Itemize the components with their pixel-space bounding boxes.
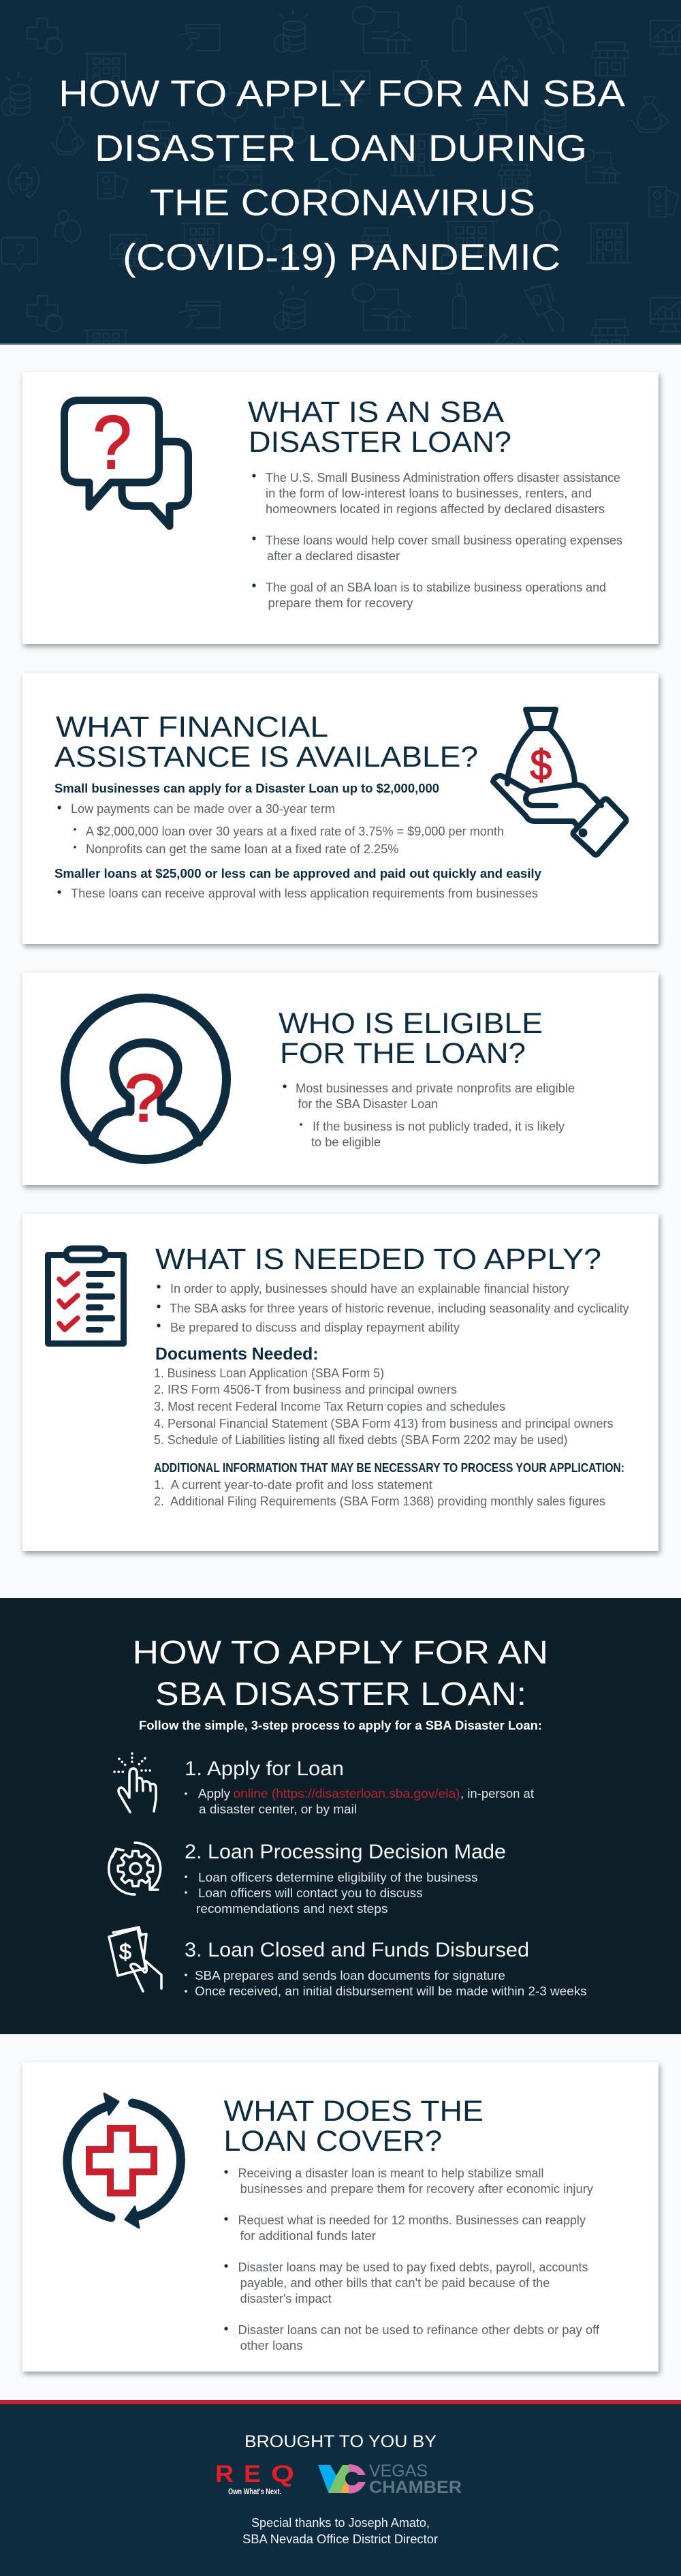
text block: eligibility bullets xyxy=(283,1082,575,1149)
step 3: loan closed and funds disbursed xyxy=(109,1927,587,1998)
icon: gear with arrows xyxy=(109,1843,161,1895)
text block: additional information list xyxy=(154,1478,605,1508)
heading: documents needed: Documents Needed: xyxy=(155,1345,319,1364)
icon: hand holding money xyxy=(109,1927,161,1991)
text block: additional information list: 1. A current year-to-date profit and loss statement xyxy=(154,1478,432,1492)
icon: person with question mark xyxy=(65,998,226,1160)
text block: additional information list: 2. Additional Filing Requirements (SBA Form 1368) providing monthly sales figures xyxy=(154,1494,605,1508)
text block: documents list: 2. IRS Form 4506-T from business and principal owners xyxy=(154,1383,457,1396)
heading: how to apply for an SBA disaster loan xyxy=(132,1635,548,1713)
panel: footer xyxy=(0,2400,681,2576)
title: DISASTER LOAN DURING xyxy=(95,127,587,169)
text block: smaller loans xyxy=(54,867,541,900)
step 2 text: Loan officers will contact you to discuss xyxy=(198,1886,422,1900)
text block: SBA disaster loan bullets: in the form of low-interest loans to businesses, renters, and xyxy=(266,487,592,500)
heading: what financial assistance is available: WHAT FINANCIAL xyxy=(56,711,328,743)
heading: what does the loan cover: WHAT DOES THE xyxy=(223,2095,484,2128)
heading: additional information: ADDITIONAL INFORMATION THAT MAY BE NECESSARY TO PROCESS YOUR APPLICATION: xyxy=(154,1461,624,1475)
logo: REQ xyxy=(215,2461,294,2496)
title: THE CORONAVIRUS xyxy=(150,181,535,224)
panel: who is eligible xyxy=(22,972,659,1185)
text block: loan coverage bullets: Request what is needed for 12 months. Businesses can reapply xyxy=(238,2213,586,2227)
icon: person with question mark: ? xyxy=(125,1060,165,1135)
panel: what does the loan cover xyxy=(22,2062,659,2372)
heading: how to apply for an SBA disaster loan: SBA DISASTER LOAN: xyxy=(155,1676,526,1713)
step 1 title: 1. Apply for Loan xyxy=(185,1758,344,1780)
text block: application bullets: The SBA asks for three years of historic revenue, including seasonality and cyclicality xyxy=(170,1302,629,1315)
heading: what is an SBA disaster loan xyxy=(248,396,511,459)
step 2 text: Loan officers determine eligibility of the business xyxy=(198,1871,478,1884)
text block: application bullets: Be prepared to discuss and display repayment ability xyxy=(170,1321,460,1334)
panel: hero header xyxy=(0,0,681,369)
footer heading: BROUGHT TO YOU BY xyxy=(244,2432,437,2451)
text block: SBA disaster loan bullets: after a declared disaster xyxy=(267,549,400,563)
text block: loan up to two million: A $2,000,000 loan over 30 years at a fixed rate of 3.75% = $9,000 per month xyxy=(86,825,504,838)
text block: SBA disaster loan bullets: prepare them for recovery xyxy=(268,596,413,610)
text block: SBA disaster loan bullets: homeowners located in regions affected by declared disasters xyxy=(266,502,605,516)
logo: Vegas Chamber: VEGAS xyxy=(369,2462,428,2481)
title: HOW TO APPLY FOR AN SBA xyxy=(59,72,625,114)
text block: application bullets xyxy=(157,1282,629,1334)
text block: documents list: 4. Personal Financial Statement (SBA Form 413) from business and principal owners xyxy=(154,1417,613,1430)
step 2 title: 2. Loan Processing Decision Made xyxy=(185,1841,506,1863)
text block: loan up to two million: Low payments can be made over a 30-year term xyxy=(71,802,335,816)
text block: loan coverage bullets: Disaster loans can not be used to refinance other debts or pay off xyxy=(238,2323,600,2337)
text block: loan coverage bullets: other loans xyxy=(240,2339,303,2352)
text block: eligibility bullets: If the business is not publicly traded, it is likely xyxy=(313,1120,565,1133)
text block: loan coverage bullets: for additional funds later xyxy=(240,2229,376,2243)
panel: what is needed to apply xyxy=(22,1214,659,1551)
text block: loan coverage bullets: Receiving a disaster loan is meant to help stabilize small xyxy=(238,2166,543,2180)
heading: what financial assistance is available: ASSISTANCE IS AVAILABLE? xyxy=(54,741,478,773)
logo: Vegas Chamber xyxy=(318,2462,462,2497)
step 2 text: recommendations and next steps xyxy=(196,1902,388,1916)
title xyxy=(59,72,625,278)
text block: smaller loans: Smaller loans at $25,000 or less can be approved and paid out quickly and easily xyxy=(54,867,541,880)
text block: documents list: 5. Schedule of Liabilities listing all fixed debts (SBA Form 2202 may be used) xyxy=(154,1433,568,1447)
heading: what is an SBA disaster loan: DISASTER LOAN? xyxy=(249,426,511,459)
logo: REQ: E xyxy=(244,2461,261,2487)
text block: eligibility bullets: to be eligible xyxy=(311,1135,381,1149)
text block: SBA disaster loan bullets xyxy=(252,471,622,610)
icon: speech bubbles with question mark xyxy=(64,401,188,526)
step 1 text: , in-person at xyxy=(460,1787,534,1800)
heading: what does the loan cover: LOAN COVER? xyxy=(223,2125,442,2158)
step 3 text xyxy=(185,1969,587,1998)
heading: who is eligible: WHO IS ELIGIBLE xyxy=(279,1007,543,1040)
logo: REQ: Own What's Next. xyxy=(228,2487,281,2496)
text block: documents list xyxy=(154,1366,613,1447)
step 2: loan processing decision made xyxy=(109,1841,506,1916)
special thanks text: Special thanks to Joseph Amato, xyxy=(251,2516,430,2530)
text block: loan up to two million xyxy=(54,782,504,856)
heading: what financial assistance is available xyxy=(54,711,478,773)
step 1 text: online (https://disasterloan.sba.gov/ela) xyxy=(233,1787,460,1800)
text block: loan up to two million: Nonprofits can get the same loan at a fixed rate of 2.25% xyxy=(86,842,399,856)
heading: what does the loan cover xyxy=(223,2095,484,2158)
icon: money bag in hand: $ xyxy=(530,742,552,789)
text block: documents list: 1. Business Loan Application (SBA Form 5) xyxy=(154,1366,384,1380)
logo: REQ: Q xyxy=(271,2461,294,2487)
step 3 text: SBA prepares and sends loan documents for signature xyxy=(195,1969,505,1982)
title: (COVID-19) PANDEMIC xyxy=(123,236,560,278)
step 3 title: 3. Loan Closed and Funds Disbursed xyxy=(185,1939,529,1961)
subheading: three step process: Follow the simple, 3-step process to apply for a SBA Disaster Loan: xyxy=(139,1719,542,1732)
panel: how to apply steps xyxy=(0,1598,681,2034)
heading: who is eligible: FOR THE LOAN? xyxy=(280,1037,526,1070)
step 2 text xyxy=(185,1871,478,1916)
icon: money bag in hand xyxy=(493,709,627,855)
text block: SBA disaster loan bullets: These loans would help cover small business operating expenses xyxy=(266,534,622,547)
panel: what is an SBA disaster loan xyxy=(22,372,659,644)
heading: how to apply for an SBA disaster loan: HOW TO APPLY FOR AN xyxy=(132,1635,548,1671)
text block: documents list: 3. Most recent Federal Income Tax Return copies and schedules xyxy=(154,1400,505,1413)
text block: smaller loans: These loans can receive approval with less application requirements from businesses xyxy=(71,887,538,900)
heading: who is eligible xyxy=(279,1007,543,1070)
step 3 text: Once received, an initial disbursement will be made within 2-3 weeks xyxy=(195,1984,587,1998)
heading: what is an SBA disaster loan: WHAT IS AN SBA xyxy=(248,396,504,429)
icon: hand holding money: $ xyxy=(119,1939,131,1964)
special thanks text: SBA Nevada Office District Director xyxy=(242,2532,438,2546)
panel: what financial assistance is available xyxy=(22,673,659,944)
icon: clipboard checklist xyxy=(48,1248,124,1344)
text block: SBA disaster loan bullets: The goal of an SBA loan is to stabilize business operations and xyxy=(266,581,606,594)
step 1 text xyxy=(185,1787,534,1816)
text block: eligibility bullets: for the SBA Disaster Loan xyxy=(298,1097,438,1111)
special thanks text xyxy=(242,2516,438,2546)
text block: loan coverage bullets: payable, and other bills that can't be paid because of the xyxy=(240,2276,550,2290)
text block: loan coverage bullets: businesses and prepare them for recovery after economic injury xyxy=(240,2182,593,2196)
icon: hand tapping xyxy=(114,1753,156,1812)
text block: loan coverage bullets: Disaster loans may be used to pay fixed debts, payroll, accounts xyxy=(238,2260,588,2274)
logo: Vegas Chamber: CHAMBER xyxy=(369,2478,462,2497)
text block: loan coverage bullets xyxy=(224,2166,600,2352)
icon: speech bubbles with question mark: ? xyxy=(93,401,131,485)
text block: eligibility bullets: Most businesses and private nonprofits are eligible xyxy=(296,1082,575,1095)
icon: medical cross with cycle arrows xyxy=(67,2094,180,2228)
text block: loan coverage bullets: disaster's impact xyxy=(240,2292,332,2305)
text block: application bullets: In order to apply, businesses should have an explainable financial history xyxy=(170,1282,569,1295)
text block: loan up to two million: Small businesses can apply for a Disaster Loan up to $2,000,000 xyxy=(54,782,439,795)
text block: SBA disaster loan bullets: The U.S. Small Business Administration offers disaster assistance xyxy=(266,471,620,485)
step 1: apply for loan xyxy=(114,1753,534,1816)
step 1 text: Apply xyxy=(198,1787,230,1800)
step 1 text: a disaster center, or by mail xyxy=(199,1803,357,1816)
logo: REQ: R xyxy=(215,2461,234,2487)
heading: what is needed to apply: WHAT IS NEEDED TO APPLY? xyxy=(155,1243,601,1276)
